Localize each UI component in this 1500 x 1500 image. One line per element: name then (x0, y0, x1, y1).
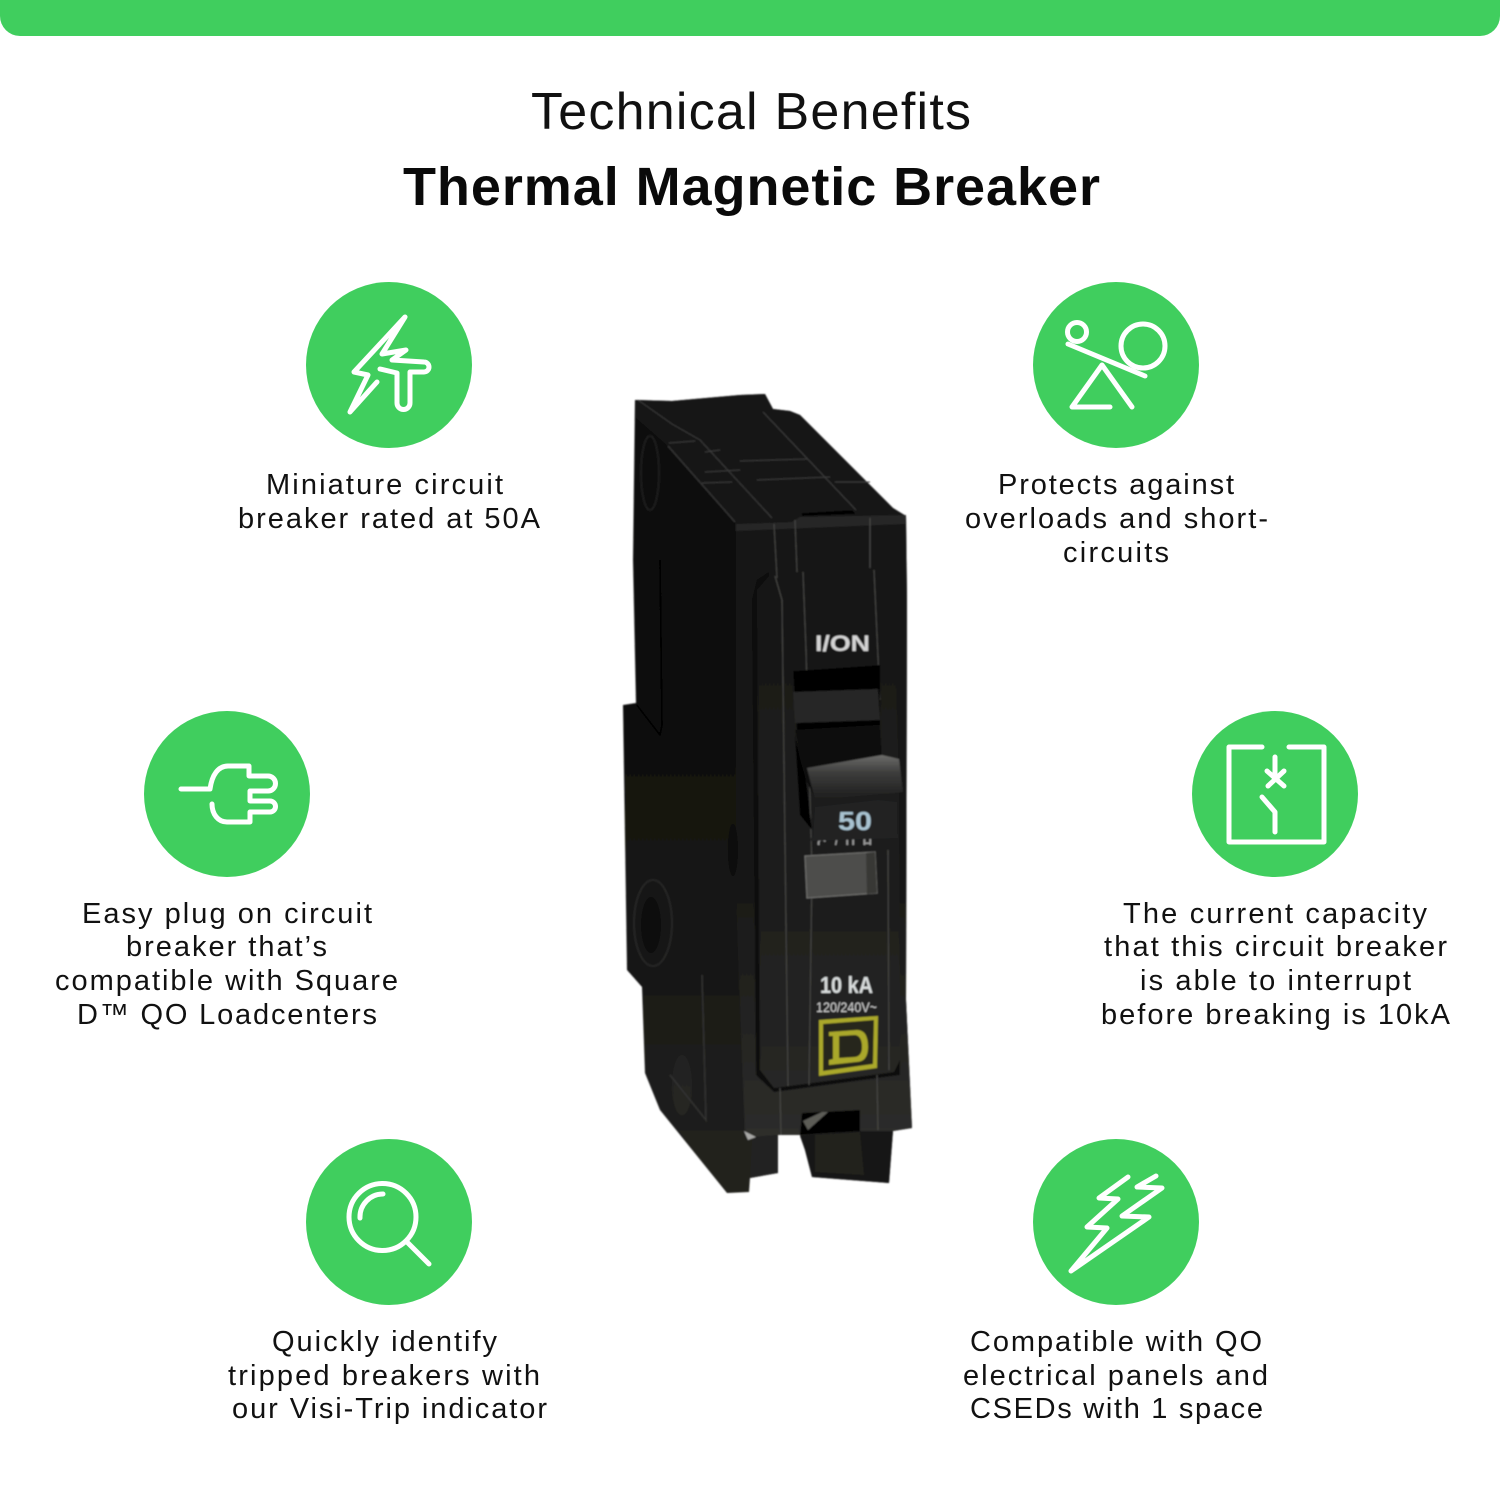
label: tripped breakers with (228, 1360, 540, 1392)
label: is able to interrupt (1140, 965, 1411, 997)
label: circuits (1063, 537, 1169, 569)
label: our Visi-Trip indicator (232, 1393, 547, 1425)
opening highlight (803, 1112, 828, 1130)
foot right (800, 1131, 893, 1183)
label (55, 898, 398, 1031)
rating cover (810, 834, 898, 841)
panel seams (774, 518, 889, 1135)
title line: Thermal Magnetic Breaker: Thermal Magnetic Breaker (403, 157, 1100, 217)
benefit: visi-trip indicator (228, 1139, 547, 1425)
foot left (750, 1135, 778, 1178)
rating label (813, 800, 897, 838)
lever pivot shadow (795, 735, 812, 830)
switch slot (793, 665, 880, 730)
text: 50: 50 (838, 806, 872, 836)
label (1101, 898, 1451, 1031)
top green bar (0, 0, 1500, 36)
label (238, 469, 541, 535)
label: compatible with Square (55, 965, 398, 997)
text: 10 kA: 10 kA (820, 972, 873, 998)
label (965, 469, 1268, 569)
mounting hole lower (634, 880, 672, 966)
Visi-Trip window (805, 852, 877, 898)
partial marking: C/UH (817, 836, 872, 851)
top face seams (638, 400, 870, 522)
foot right face (815, 1132, 864, 1175)
label: before breaking is 10kA (1101, 999, 1451, 1031)
icon: seesaw (1033, 282, 1199, 448)
handle lower (795, 725, 903, 798)
benefit: compatible with QO (963, 1139, 1268, 1425)
label: Quickly identify (272, 1326, 498, 1358)
label: overloads and short- (965, 503, 1268, 535)
label: Compatible with QO (970, 1326, 1262, 1358)
benefit: easy plug on (55, 711, 398, 1031)
label: breaker that’s (126, 931, 327, 963)
breaker body silhouette (623, 394, 912, 1193)
label: Miniature circuit (266, 469, 503, 501)
handle upper (793, 689, 880, 723)
front top highlight (736, 515, 906, 531)
logo: Square D (819, 1016, 878, 1076)
mounting hole upper (641, 436, 659, 510)
text: 120/240V~: 120/240V~ (816, 999, 877, 1015)
benefit: current capacity (1101, 711, 1451, 1031)
icon: double lightning (1033, 1139, 1199, 1305)
panel shadow (752, 572, 900, 1092)
label (963, 1326, 1268, 1425)
handle grey lip (807, 755, 903, 800)
icon: lightning and T (306, 282, 472, 448)
window shade (866, 852, 877, 894)
label: that this circuit breaker (1104, 931, 1447, 963)
icon: magnifier (306, 1139, 472, 1305)
icon: plug (144, 711, 310, 877)
label: The current capacity (1123, 898, 1428, 930)
title (403, 83, 1100, 217)
title line: Technical Benefits: Technical Benefits (531, 83, 971, 141)
top face (636, 394, 906, 524)
top slot (802, 510, 856, 516)
icon: switch box (1192, 711, 1358, 877)
label: electrical panels and (963, 1360, 1268, 1392)
benefit: miniature circuit breaker (238, 282, 541, 535)
label: breaker rated at 50A (238, 503, 541, 535)
front face (736, 516, 912, 1137)
product photo: circuit breaker (623, 394, 912, 1193)
label: Easy plug on circuit (82, 898, 372, 930)
text: I/ON: I/ON (815, 631, 870, 656)
label: D™ QO Loadcenters (77, 999, 377, 1031)
benefit: protects against overloads (965, 282, 1268, 569)
label: CSEDs with 1 space (970, 1393, 1263, 1425)
side scuff (744, 1131, 756, 1140)
side recess (636, 560, 662, 735)
bottom opening (800, 1110, 860, 1135)
label (228, 1326, 547, 1425)
handle panel (757, 569, 900, 1088)
label: Protects against (998, 469, 1234, 501)
